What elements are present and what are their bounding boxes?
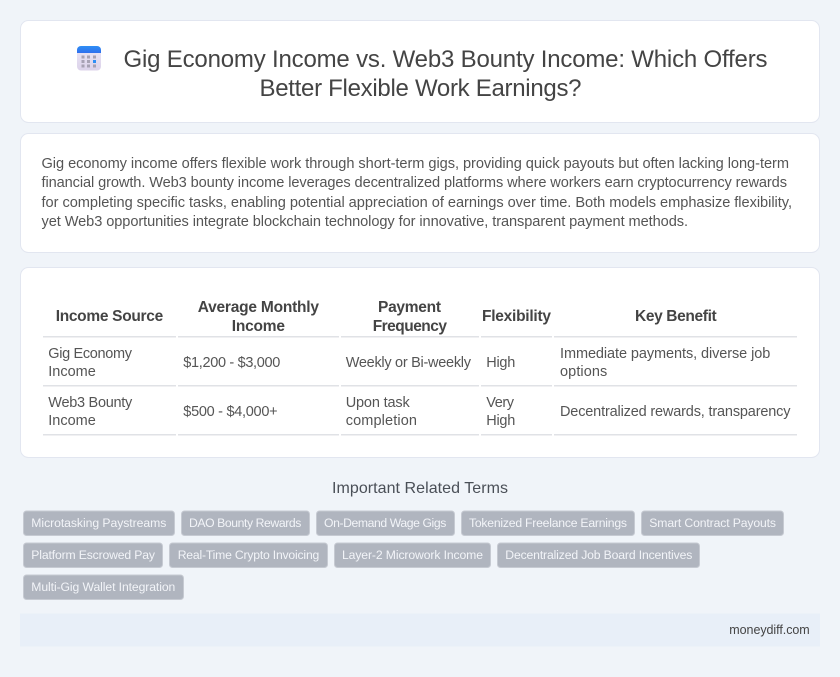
- tag: Real-Time Crypto Invoicing: [178, 548, 319, 562]
- table row: web3 bounty income: Income: [48, 413, 96, 429]
- tag: DAO Bounty Rewards: [189, 516, 301, 530]
- table header: Income Source: [56, 308, 164, 325]
- table row: gig economy income: High: [486, 355, 515, 371]
- text block: summary: financial growth. Web3 bounty income leverages decentralized platforms where workers earn cryptocurrency rewards: [42, 175, 787, 191]
- table header: Payment: [378, 299, 441, 316]
- tag list: [24, 511, 784, 600]
- table row: web3 bounty income: High: [486, 413, 515, 429]
- table row: gig economy income: Gig Economy: [48, 346, 133, 362]
- tag: [462, 511, 634, 536]
- table rules: [43, 336, 797, 436]
- title: Gig Economy Income vs. Web3 Bounty Income: Which Offers: [124, 46, 768, 73]
- table row: web3 bounty income: Very: [486, 395, 515, 411]
- tag: [24, 543, 162, 568]
- icon: calendar: [77, 46, 101, 70]
- tag: Layer-2 Microwork Income: [342, 548, 483, 562]
- tag: [498, 543, 700, 568]
- tag: Tokenized Freelance Earnings: [469, 516, 627, 530]
- table header: Average Monthly: [198, 299, 319, 316]
- table row: web3 bounty income: completion: [346, 413, 417, 429]
- tag: [24, 511, 174, 536]
- footer: [20, 614, 820, 646]
- tag: Decentralized Job Board Incentives: [505, 548, 692, 562]
- tag: [334, 543, 490, 568]
- title: Better Flexible Work Earnings?: [260, 75, 582, 102]
- table row: gig economy income: options: [560, 364, 607, 380]
- panel: title card: [20, 20, 820, 122]
- tag: [642, 511, 784, 536]
- table row: gig economy income: [48, 346, 770, 380]
- tag: Smart Contract Payouts: [649, 516, 776, 530]
- tag: [24, 575, 184, 600]
- tag: [182, 511, 310, 536]
- table row: gig economy income: Immediate payments, diverse job: [560, 346, 770, 362]
- table header: [56, 299, 717, 335]
- table header: Flexibility: [482, 308, 551, 325]
- table row: gig economy income: Weekly or Bi-weekly: [346, 355, 472, 371]
- text block: summary: [42, 156, 792, 230]
- panel: comparison table: [20, 268, 820, 458]
- tag: Microtasking Paystreams: [31, 516, 166, 530]
- tag: On-Demand Wage Gigs: [324, 516, 446, 530]
- table row: web3 bounty income: $500 - $4,000+: [183, 404, 278, 420]
- table row: web3 bounty income: Decentralized rewards, transparency: [560, 404, 791, 420]
- text block: summary: Gig economy income offers flexible work through short-term gigs, providing quick payouts but often lacking long-term: [42, 156, 789, 172]
- table row: web3 bounty income: [48, 395, 791, 429]
- title: [124, 46, 768, 102]
- tag: Multi-Gig Wallet Integration: [31, 580, 175, 594]
- heading: important related terms: Important Related Terms: [332, 480, 508, 497]
- tag: Platform Escrowed Pay: [31, 548, 156, 562]
- table row: gig economy income: $1,200 - $3,000: [183, 355, 280, 371]
- table row: web3 bounty income: Upon task: [346, 395, 410, 411]
- tag: [170, 543, 328, 568]
- tag: [316, 511, 454, 536]
- table header: Income: [232, 318, 285, 335]
- text block: summary: yet Web3 opportunities integrate blockchain technology for innovative, transparent payment methods.: [42, 214, 688, 230]
- footer: moneydiff.com: [729, 623, 810, 637]
- panel: summary paragraph: [20, 134, 820, 252]
- table header: Key Benefit: [635, 308, 717, 325]
- text block: summary: for completing specific tasks, enabling potential appreciation of earnings over time. Both models emphasize flexibility,: [42, 195, 792, 211]
- table row: web3 bounty income: Web3 Bounty: [48, 395, 133, 411]
- table row: gig economy income: Income: [48, 364, 96, 380]
- table header: Frequency: [373, 318, 447, 335]
